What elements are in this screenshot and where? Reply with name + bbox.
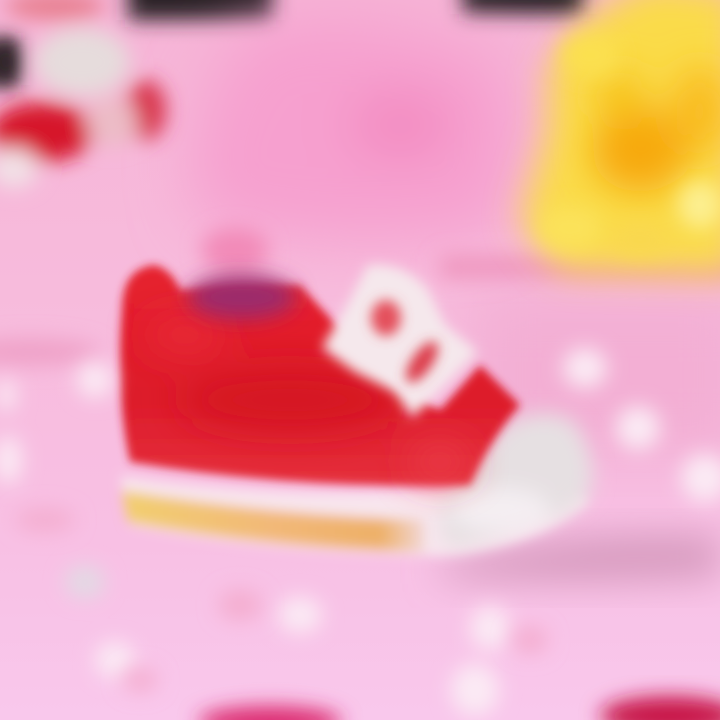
shoe tongue and laces: white: [322, 265, 478, 418]
shoe: red baby sneaker: [120, 265, 593, 556]
shoe lace details: red gaps: [371, 300, 444, 387]
toy: yellow star, top right: [520, 0, 720, 275]
scattered white pearls on fabric: [0, 348, 720, 716]
background: dark top band: [0, 0, 584, 85]
background: horizon fold shadow: [0, 228, 720, 366]
shoe sole: white and yellow stripe: [120, 476, 590, 556]
toy: red and white figure, top left: [0, 0, 166, 188]
shoe toe cap: white rubber: [440, 414, 593, 548]
shoe shading: deeper red: [145, 317, 470, 480]
small pink spots on fabric: [15, 508, 548, 692]
shoe opening: purple lining: [188, 275, 296, 319]
background: right side fabric tint: [470, 290, 720, 460]
shadow: below shoe: [440, 533, 720, 583]
shoe upper: red canvas: [120, 265, 520, 486]
background: raised pink cloth folds: [192, 18, 520, 243]
foreground: red objects at bottom edge: [198, 696, 720, 720]
